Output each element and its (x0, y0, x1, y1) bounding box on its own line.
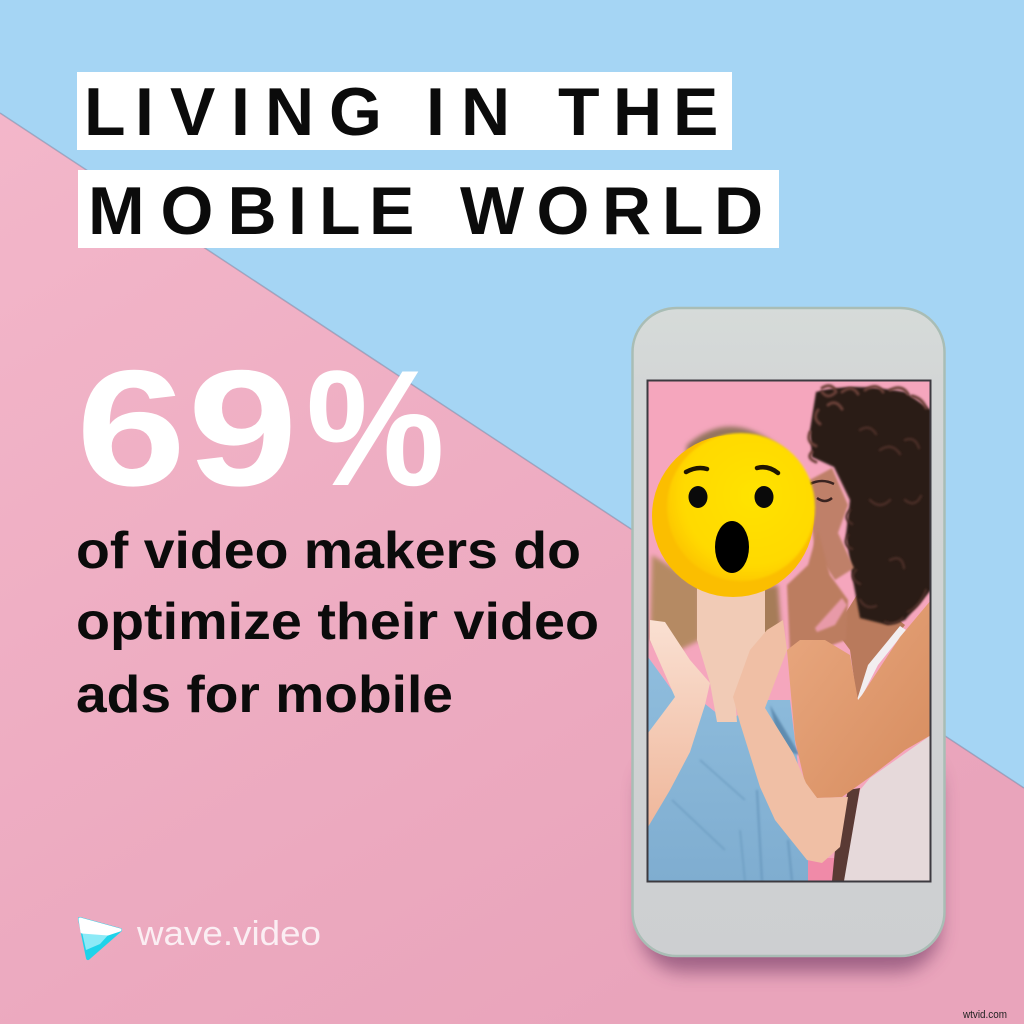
white dress (843, 735, 931, 881)
emoji face (652, 433, 815, 597)
big statistic 69% (76, 336, 445, 521)
pink gap (808, 858, 834, 882)
phone (632, 307, 945, 972)
title line 2: MOBILE WORLD (88, 173, 763, 249)
blonde woman hair lower (650, 555, 700, 650)
whisper hand (787, 530, 848, 655)
big statistic 69%: 69 (76, 336, 298, 520)
lips pink (815, 598, 847, 632)
emoji highlight (667, 433, 815, 581)
curly hair (809, 386, 931, 625)
hair curls (809, 386, 926, 623)
emoji eyebrows (686, 467, 778, 473)
dark gap between dresses (832, 788, 860, 881)
title line 1: LIVING IN THE (84, 74, 718, 150)
icon: play triangle (80, 919, 120, 958)
description text (76, 522, 599, 724)
blonde woman hair top (683, 424, 776, 452)
description text: ads for mobile (76, 666, 453, 724)
big statistic 69%: % (306, 337, 445, 521)
logo wordmark: wave.video (136, 915, 321, 953)
left hand and arm (648, 620, 710, 827)
white strap (857, 626, 906, 700)
phone screen border (648, 380, 930, 882)
phone screen photo (648, 381, 931, 882)
description text: optimize their video (76, 593, 599, 651)
blue dress (648, 657, 812, 881)
curly woman face (806, 468, 854, 580)
logo: wave.video (80, 915, 321, 958)
neck and chest (697, 585, 765, 722)
emoji eyes (688, 486, 708, 508)
description text: of video makers do (76, 522, 581, 580)
tan arm crossing (787, 600, 931, 798)
chest tan (842, 595, 905, 698)
right hand and arm (733, 620, 848, 863)
phone body (632, 307, 945, 957)
emoji mouth (715, 521, 749, 573)
phone shadow (640, 750, 940, 972)
title (77, 72, 779, 249)
watermark: wtvid.com (962, 1009, 1007, 1021)
